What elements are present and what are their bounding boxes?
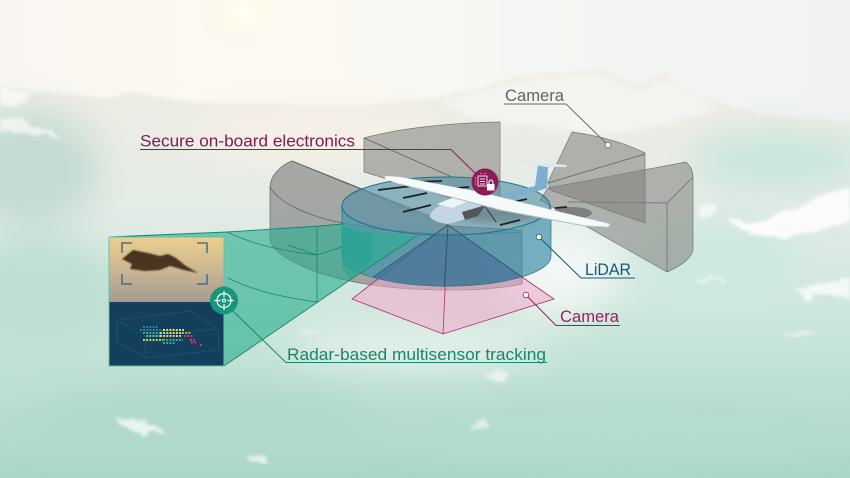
callout: lower camera: Camera xyxy=(560,307,620,326)
panel: camera image of tracked object xyxy=(109,237,224,302)
callout: lower camera xyxy=(523,292,620,326)
icon: radar target xyxy=(210,286,238,314)
icon: secure electronics badge xyxy=(472,168,498,196)
callout: upper camera xyxy=(504,86,611,148)
grey sector: rear xyxy=(364,122,500,200)
callout: secure on-board electronics: Secure on-board electronics xyxy=(140,132,355,150)
LiDAR cylinder xyxy=(342,177,551,286)
field of view: green radar sector xyxy=(109,224,417,366)
callout: radar-based multisensor tracking xyxy=(233,311,547,364)
detected drone silhouette xyxy=(122,250,198,273)
grey sector: left xyxy=(270,161,522,290)
callout: upper camera: Camera xyxy=(505,86,565,105)
panel: radar point cloud xyxy=(109,302,224,366)
point cloud dots xyxy=(140,327,203,345)
callout: LiDAR xyxy=(536,234,635,279)
callout: secure on-board electronics xyxy=(140,132,476,174)
grey sector: far right xyxy=(540,162,693,272)
panel frame xyxy=(109,237,224,366)
main wing xyxy=(385,176,610,227)
grey sector: upper right camera xyxy=(548,132,645,223)
snow and cloud patches xyxy=(0,86,850,464)
callout: LiDAR: LiDAR xyxy=(585,260,631,279)
field of view: pink downward camera xyxy=(352,225,554,334)
fuselage pod xyxy=(430,200,482,224)
tail xyxy=(500,165,548,200)
drone aircraft xyxy=(378,160,610,227)
tracking brackets xyxy=(122,243,207,284)
field of view: rear grey sensor sectors xyxy=(270,122,693,290)
downward camera rays through cylinder xyxy=(373,225,522,287)
callout: radar-based multisensor tracking: Radar-based multisensor tracking xyxy=(287,345,546,364)
rotor booms and propellers xyxy=(378,181,567,225)
